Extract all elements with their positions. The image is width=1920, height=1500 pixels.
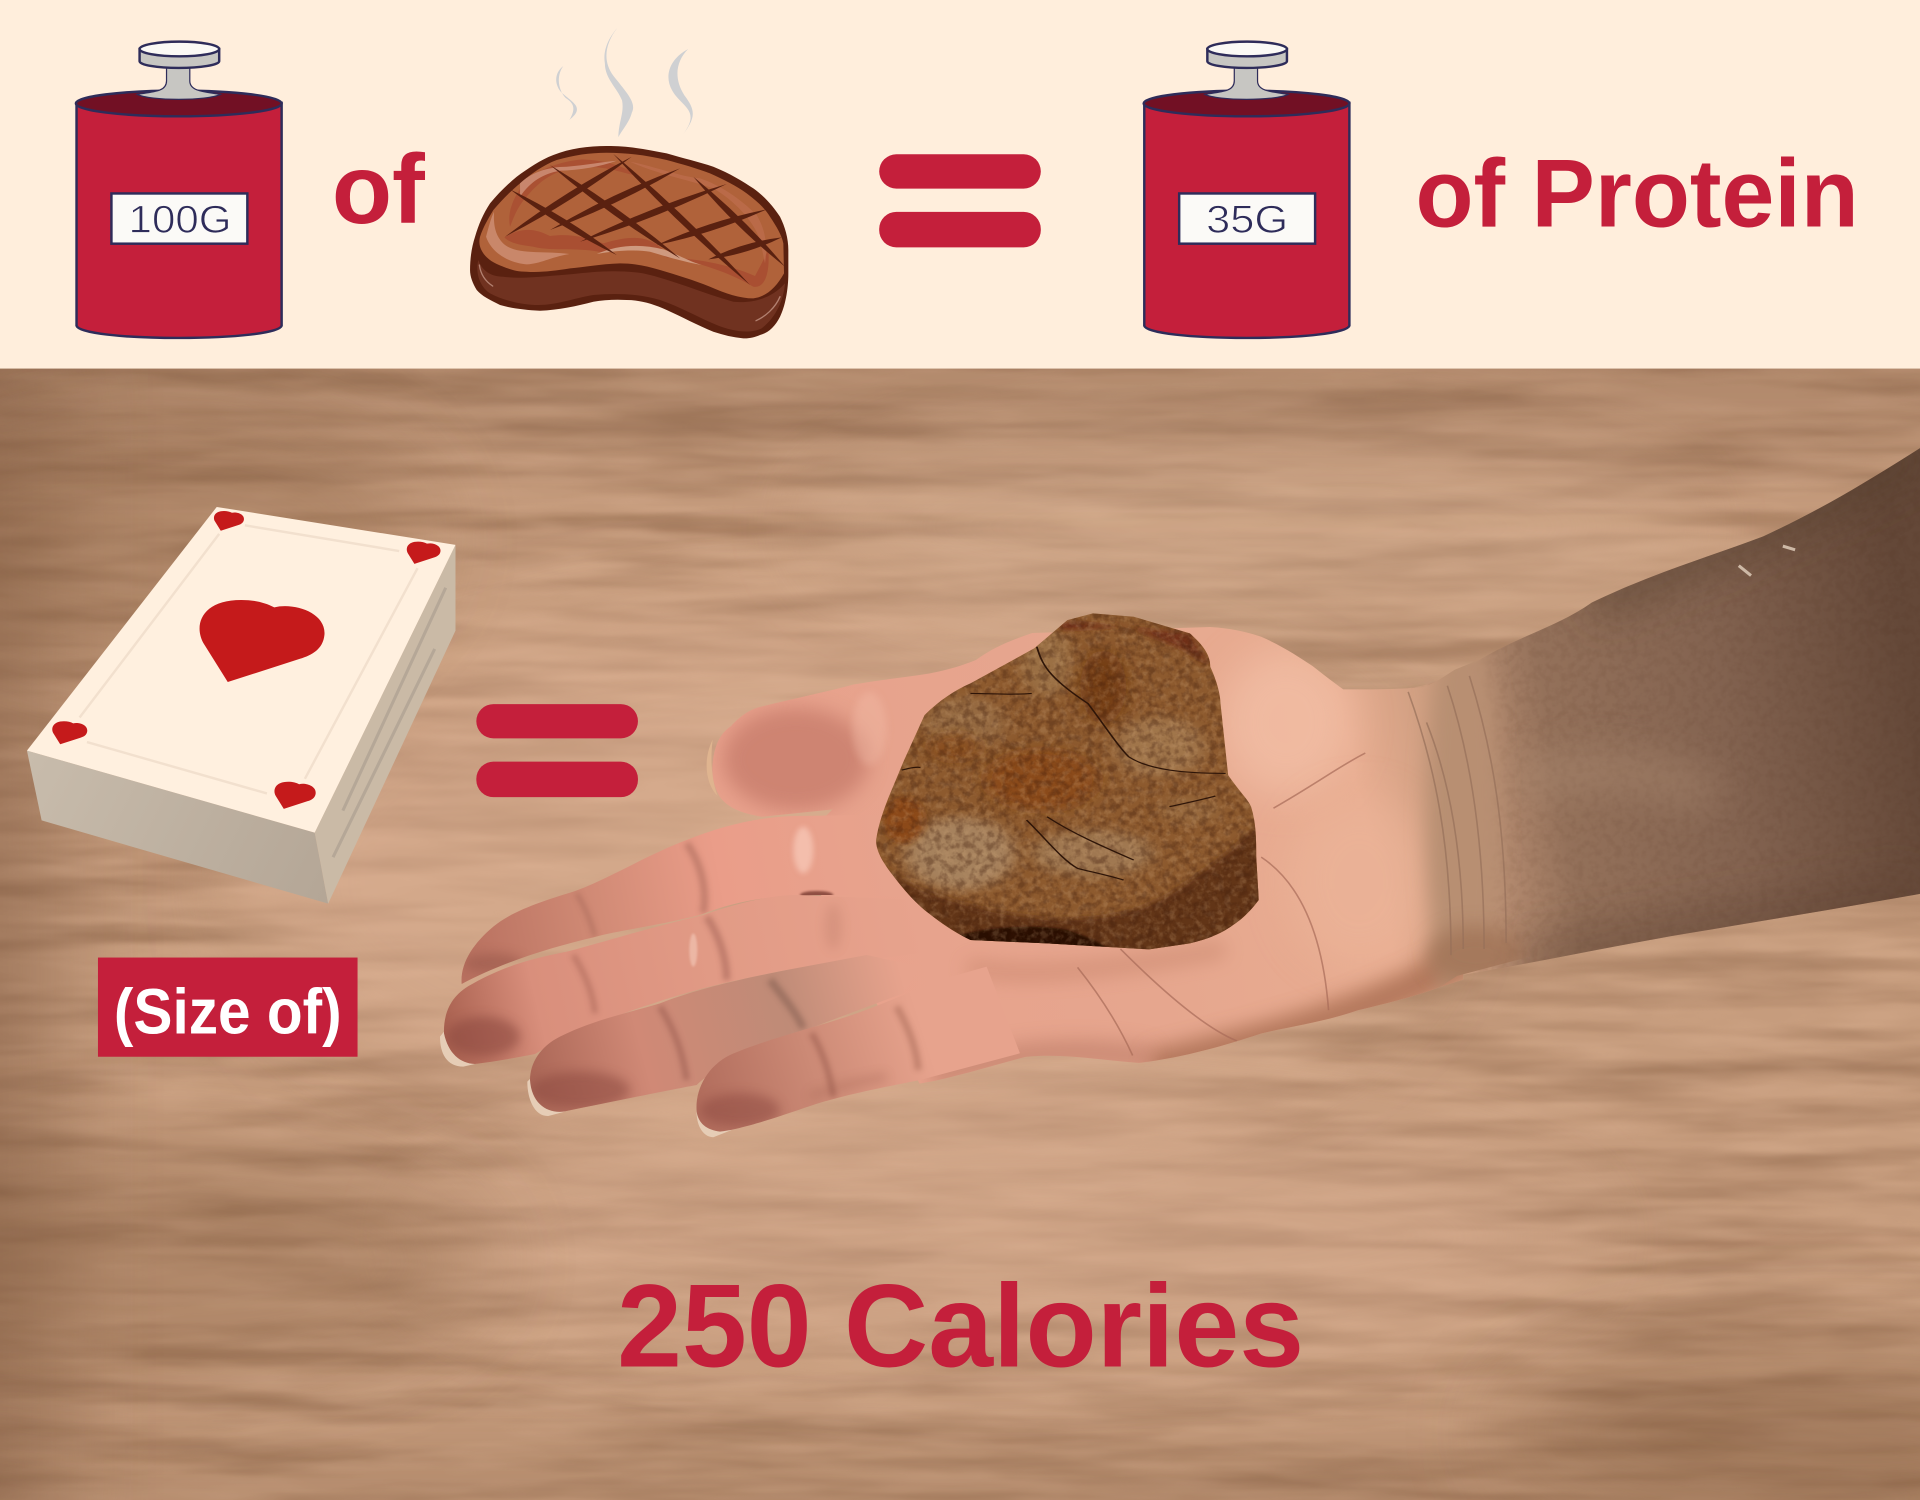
label: size of [98, 958, 358, 1057]
corner heart top [214, 511, 244, 531]
large heart [200, 600, 325, 682]
arm [1408, 441, 1920, 980]
text: 250 Calories: 250 Calories [617, 1261, 1304, 1392]
text: of: of [332, 134, 425, 244]
text: of Protein: of Protein [1416, 140, 1859, 248]
palm shading [722, 649, 1469, 1078]
deck top face [27, 507, 456, 833]
label: size of: (Size of) [114, 976, 342, 1047]
wrist blend [1408, 658, 1518, 986]
corner heart bottom [274, 782, 316, 809]
middle finger [440, 895, 852, 1067]
icon: lower equals sign [476, 704, 638, 797]
icon: 100G weight [76, 42, 282, 338]
cooked steak photo [857, 600, 1277, 967]
icon: 35G weight: 35G [1206, 199, 1288, 242]
top banner background [0, 0, 1920, 369]
corner heart left [52, 721, 87, 744]
index finger [462, 816, 834, 984]
icon: deck of cards [27, 507, 456, 904]
icon: top equals sign [879, 154, 1041, 247]
deck right side [315, 545, 456, 904]
icon: 35G weight [1144, 42, 1349, 338]
deck left side [27, 751, 328, 904]
thumb nail [707, 740, 718, 796]
icon: 100G weight: 100G [129, 199, 231, 242]
pinky finger [696, 967, 1020, 1137]
palm and thumb [712, 627, 1463, 1084]
card inner border [80, 525, 418, 793]
fingers [440, 813, 1020, 1137]
ring finger [527, 955, 920, 1116]
wood background photo [0, 318, 1920, 1500]
icon: cooked steak [470, 146, 788, 338]
corner heart right [407, 542, 441, 564]
hand [440, 612, 1524, 1137]
icon: steam [556, 28, 693, 137]
